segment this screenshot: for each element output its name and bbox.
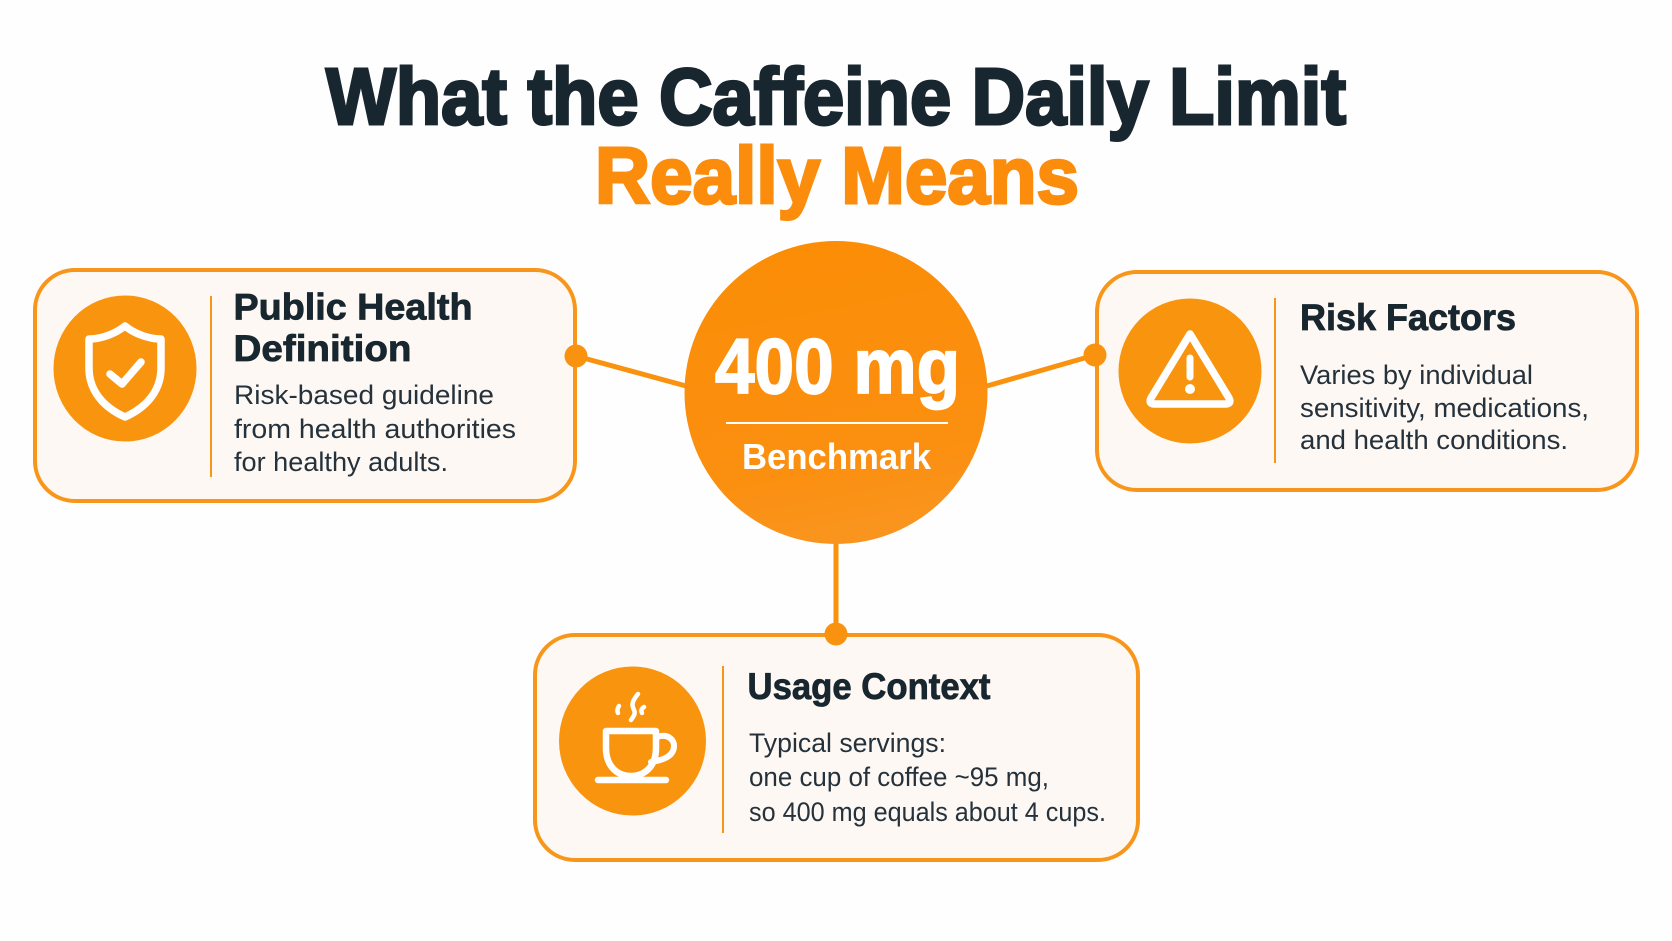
heading — [234, 286, 472, 369]
text block — [1300, 360, 1589, 455]
central benchmark circle — [684, 241, 988, 544]
icon: coffee cup — [559, 666, 706, 816]
text block: from health authorities — [234, 414, 516, 444]
icon: warning triangle — [1118, 298, 1262, 444]
connector: left — [576, 356, 686, 386]
connector: bottom — [834, 540, 838, 634]
title line 2: Really Means — [595, 131, 1079, 220]
text block — [749, 728, 1106, 827]
heading: Usage Context — [748, 666, 990, 707]
icon: shield with check — [54, 296, 196, 442]
title — [326, 52, 1346, 220]
panel: usage context — [535, 622, 1138, 860]
title line 1: What the Caffeine Daily Limit — [326, 52, 1346, 141]
panel: public health definition — [35, 270, 588, 501]
label: benchmark: Benchmark — [742, 436, 932, 477]
text block: Risk-based guideline — [234, 380, 494, 410]
text block: one cup of coffee ~95 mg, — [749, 762, 1049, 792]
text block — [234, 380, 516, 477]
text block: Varies by individual — [1300, 360, 1533, 390]
text block: and health conditions. — [1300, 425, 1568, 455]
connector: right — [987, 355, 1095, 386]
panel: risk factors — [1084, 272, 1637, 490]
text block: for healthy adults. — [234, 447, 448, 477]
value: 400 mg: 400 mg — [715, 322, 960, 410]
heading: Risk Factors — [1300, 297, 1516, 338]
text block: Typical servings: — [749, 728, 946, 758]
text block: so 400 mg equals about 4 cups. — [749, 797, 1106, 827]
heading: Public Health — [234, 286, 472, 328]
text block: sensitivity, medications, — [1300, 393, 1589, 423]
heading: Definition — [234, 328, 412, 369]
